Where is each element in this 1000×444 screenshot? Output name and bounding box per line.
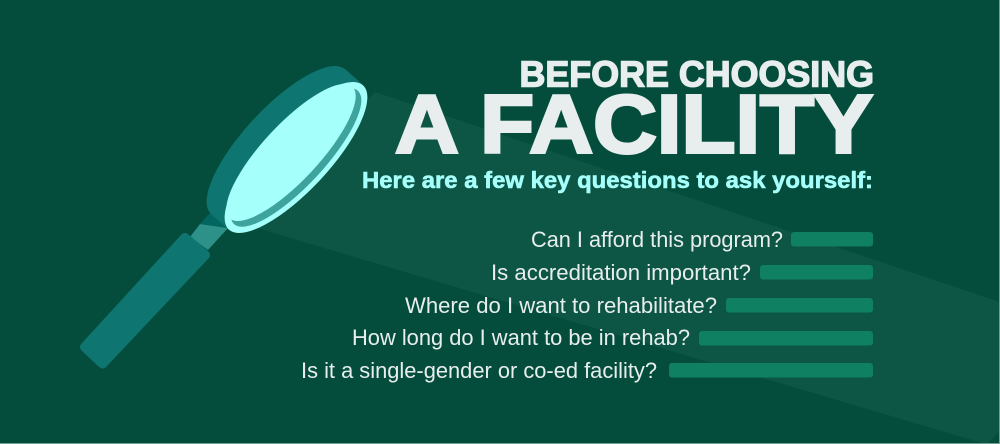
question list — [301, 227, 873, 383]
question 3 — [405, 293, 873, 318]
question 1: Can I afford this program? — [531, 227, 783, 252]
question 3: Where do I want to rehabilitate? — [405, 293, 717, 318]
question 5 — [301, 358, 873, 383]
neck — [190, 224, 228, 250]
title — [395, 54, 874, 170]
lens rim — [205, 63, 387, 252]
title line two: A FACILITY — [395, 78, 873, 170]
question 4 — [352, 325, 873, 350]
question 4: How long do I want to be in rehab? — [352, 325, 690, 350]
lens rim back — [187, 47, 369, 236]
handle — [80, 233, 210, 368]
light beam — [250, 92, 1000, 443]
subtitle: Here are a few key questions to ask yourself: — [362, 167, 873, 193]
question 2: Is accreditation important? — [491, 260, 751, 285]
magnifying glass — [80, 47, 387, 368]
question 2 — [491, 260, 873, 285]
lens inner shadow — [213, 72, 379, 243]
title line one: BEFORE CHOOSING — [520, 54, 874, 94]
neck shadow — [200, 213, 228, 228]
question 5: Is it a single-gender or co-ed facility? — [301, 358, 657, 383]
lens glass — [209, 68, 373, 237]
